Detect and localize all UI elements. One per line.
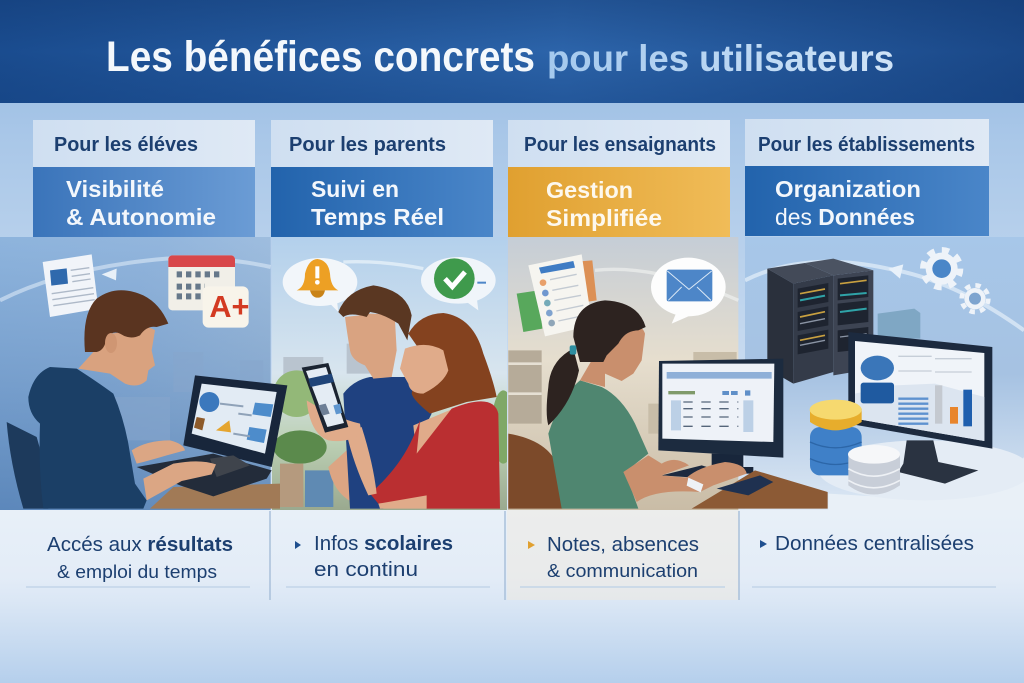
panel: établissements heading: des Données bbox=[775, 204, 915, 230]
smartphone bbox=[302, 363, 348, 433]
caption: enseignants: Notes, absences bbox=[547, 534, 699, 556]
caption: élèves: Accés aux résultats bbox=[47, 534, 233, 556]
panel: établissements heading: Organization bbox=[775, 176, 921, 202]
bottom caption band bbox=[0, 510, 1024, 600]
data monitor bbox=[848, 332, 992, 484]
panel: enseignants heading: Simplifiée bbox=[546, 205, 662, 231]
icon: server racks bbox=[767, 259, 873, 384]
title banner bbox=[0, 0, 1024, 103]
panel: élèves heading: & Autonomie bbox=[66, 204, 216, 230]
panel: parents heading bbox=[271, 120, 493, 237]
caption: enseignants: & communication bbox=[547, 561, 698, 581]
mother bbox=[307, 313, 500, 509]
icon: calendar bbox=[168, 255, 235, 310]
panel: enseignants heading bbox=[508, 120, 730, 237]
icon: mail bubble bbox=[651, 258, 726, 324]
icon: check bubble bbox=[421, 257, 496, 310]
panel: parents heading: Temps Réel bbox=[311, 204, 444, 230]
title: Les bénéfices concrets bbox=[106, 33, 535, 81]
teacher bbox=[508, 300, 648, 509]
panel: élèves heading: Pour les éléves bbox=[54, 134, 198, 156]
panel: établissements heading: Pour les établissements bbox=[758, 134, 975, 156]
caption: élèves: & emploi du temps bbox=[57, 562, 217, 582]
title: pour les utilisateurs bbox=[547, 38, 894, 79]
panel: parents heading: Pour les parents bbox=[289, 134, 446, 156]
panel: parents heading: Suivi en bbox=[311, 176, 399, 202]
panel: élèves illustration bbox=[0, 237, 287, 510]
icon: document bbox=[43, 254, 117, 317]
icon: gears bbox=[923, 250, 988, 312]
desk and keyboard bbox=[623, 455, 828, 509]
panel: enseignants heading: Gestion bbox=[546, 177, 633, 203]
panel: parents illustration bbox=[272, 257, 507, 510]
title bbox=[106, 33, 894, 81]
caption: parents: Infos scolaires bbox=[314, 533, 453, 555]
desktop monitor bbox=[658, 359, 783, 474]
icon: small screen bbox=[878, 309, 920, 339]
caption: parents: en continu bbox=[314, 559, 418, 581]
panel: élèves heading: Visibilité bbox=[66, 176, 164, 202]
icon: checklist bbox=[517, 254, 597, 336]
caption: parents bbox=[295, 533, 453, 581]
laptop bbox=[132, 375, 287, 509]
panel: enseignants illustration bbox=[508, 237, 828, 510]
caption: enseignants bbox=[528, 534, 699, 581]
icon: database cylinders bbox=[810, 400, 900, 494]
caption: élèves bbox=[47, 534, 233, 582]
panel: établissements heading bbox=[745, 119, 989, 236]
student bbox=[7, 290, 168, 509]
panel: élèves heading bbox=[33, 120, 255, 237]
father bbox=[328, 285, 432, 509]
caption: établissements: Données centralisées bbox=[775, 533, 974, 555]
panel: enseignants heading: Pour les ensaignants bbox=[524, 134, 716, 156]
panel: établissements illustration bbox=[745, 237, 1024, 510]
icon: A+ grade: A+ bbox=[209, 290, 249, 324]
icon: bell bubble bbox=[283, 258, 357, 312]
